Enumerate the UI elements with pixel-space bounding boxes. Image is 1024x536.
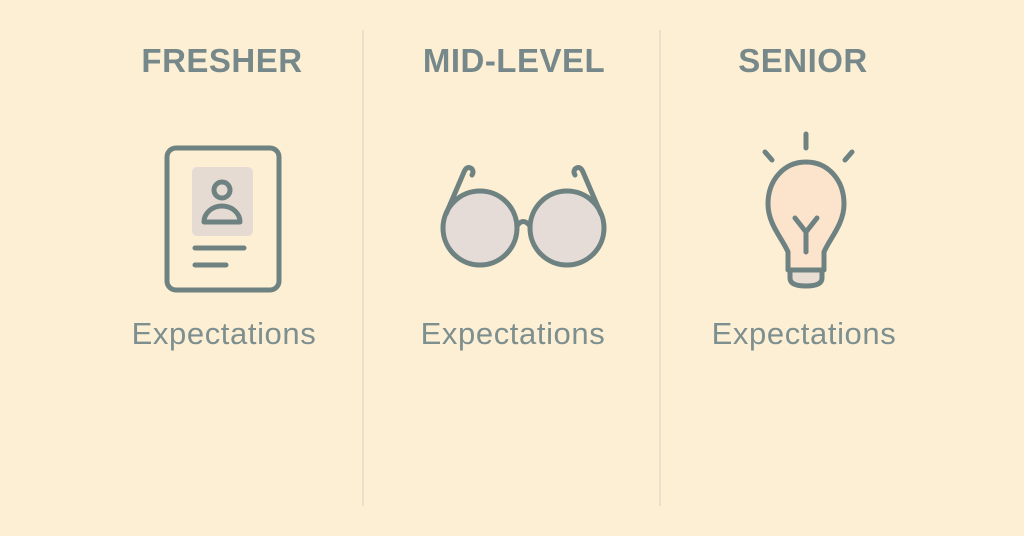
label: mid-level expectations: Expectations — [421, 316, 605, 351]
title: senior: SENIOR — [738, 42, 868, 79]
icon: light bulb — [765, 134, 852, 286]
label: senior expectations: Expectations — [712, 316, 896, 351]
title: mid-level: MID-LEVEL — [423, 42, 605, 79]
label: fresher expectations: Expectations — [132, 316, 316, 351]
title: fresher: FRESHER — [141, 42, 303, 79]
icon: glasses — [443, 168, 604, 265]
icon: id card — [167, 148, 279, 290]
